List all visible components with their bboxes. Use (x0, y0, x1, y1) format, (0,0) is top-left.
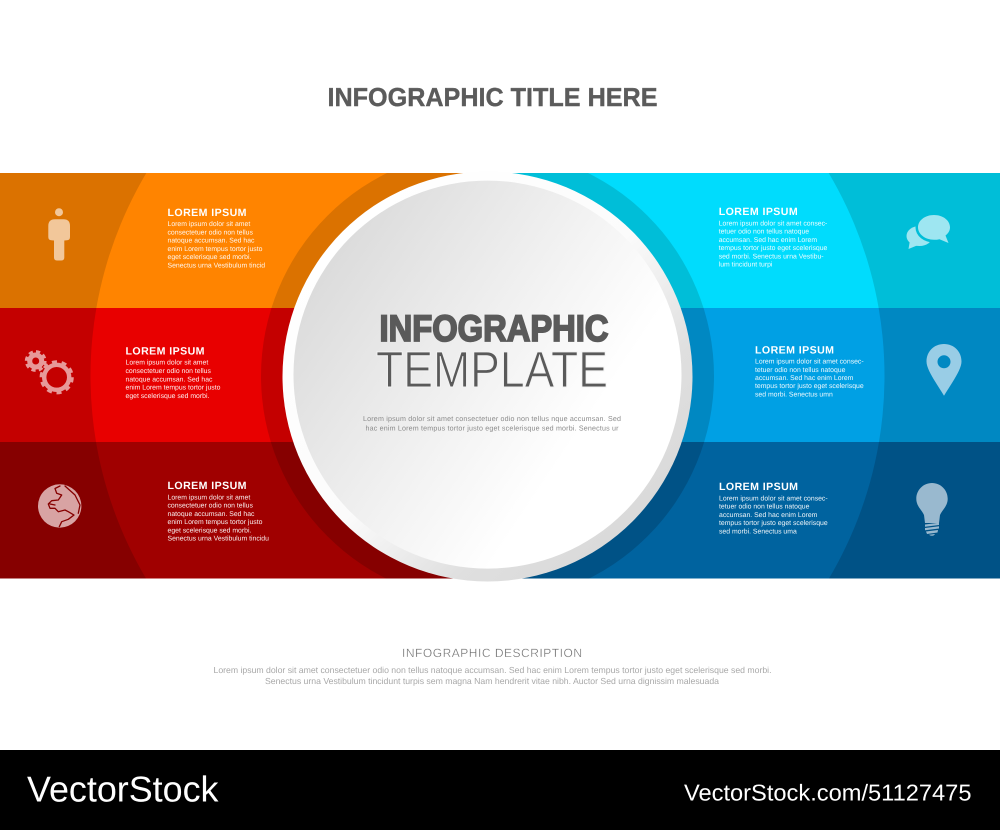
text block: cyan: Lorem ipsum dolor sit amet consec- (719, 220, 827, 227)
center text: hac enim Lorem tempus tortor justo eget scelerisque sed morbi. Senectus ur (366, 424, 619, 432)
band: navy (522, 442, 1000, 578)
text block: maroon (168, 480, 269, 543)
text block: blue: Lorem ipsum dolor sit amet consec- (755, 358, 864, 366)
text block: navy: Lorem ipsum dolor sit amet consec- (719, 495, 828, 502)
text block: orange: Lorem ipsum dolor sit amet (168, 221, 250, 228)
center heading: TEMPLATE (376, 341, 608, 398)
text block: maroon: enim Lorem tempus tortor justo (168, 519, 263, 526)
icon: globe (38, 484, 81, 528)
center text (363, 415, 621, 432)
text block: maroon: natoque accumsan. Sed hac (168, 511, 255, 518)
center text: Lorem ipsum dolor sit amet consectetuer odio non tellus nque accumsan. Sed (363, 415, 621, 423)
text block: cyan: lum tincidunt turpi (719, 262, 773, 269)
text block: red: Lorem ipsum dolor sit amet (126, 360, 208, 367)
center heading: INFOGRAPHIC (380, 308, 608, 349)
text block: navy: tetuer odio non tellus natoque (719, 504, 810, 510)
text block: maroon: consectetuer odio non tellus (168, 503, 253, 510)
center heading (376, 308, 608, 398)
text block: maroon: eget scelerisque sed morbi. (168, 527, 251, 534)
icon: person (48, 208, 70, 260)
text block: blue: LOREM IPSUM (755, 344, 834, 356)
text block: maroon: LOREM IPSUM (168, 480, 247, 492)
footer bar (0, 750, 1000, 830)
icon: map pin (926, 344, 962, 396)
text block: cyan: accumsan. Sed hac enim Lorem (719, 237, 817, 244)
text block: orange: enim Lorem tempus tortor justo (168, 246, 263, 253)
text block: cyan: tempus tortor justo eget scelerisque (719, 245, 828, 252)
text block: orange: natoque accumsan. Sed hac (168, 238, 255, 245)
text block: orange: Senectus urna Vestibulum tincid (168, 262, 265, 269)
description text (214, 665, 772, 686)
icon: light bulb (916, 483, 948, 536)
text block: maroon: Lorem ipsum dolor sit amet (168, 494, 250, 501)
text block: orange: eget scelerisque sed morbi. (168, 254, 251, 261)
icon: gears (26, 352, 72, 393)
band: red (0, 308, 294, 442)
footer bar: VectorStock (27, 768, 219, 810)
text block: red: enim Lorem tempus tortor justo (126, 385, 221, 392)
text block: cyan: LOREM IPSUM (719, 206, 798, 218)
text block: navy (719, 481, 828, 535)
text block: blue: accumsan. Sed hac enim Lorem (755, 375, 854, 382)
footer bar: VectorStock.com/51127475 (684, 780, 972, 806)
band: orange (0, 173, 463, 308)
text block: red: consectetuer odio non tellus (126, 368, 211, 375)
text block: cyan: tetuer odio non tellus natoque (719, 229, 809, 236)
text block: navy: accumsan. Sed hac enim Lorem (719, 512, 818, 519)
icon: chat bubbles (906, 212, 952, 249)
text block: maroon: Senectus urna Vestibulum tincidu (168, 536, 269, 543)
text block: red (126, 346, 221, 400)
band: cyan (512, 173, 1000, 308)
description heading: INFOGRAPHIC DESCRIPTION (402, 646, 582, 660)
description text: Lorem ipsum dolor sit amet consectetuer odio non tellus natoque accumsan. Sed hac enim Lorem tempus tortor justo eget scelerisque sed morbi. (214, 665, 772, 675)
central circle (282, 172, 692, 582)
text block: blue: tempus tortor justo eget scelerisque (755, 383, 864, 390)
band: blue (680, 308, 1000, 442)
text block: red: natoque accumsan. Sed hac (126, 376, 213, 383)
text block: orange: LOREM IPSUM (168, 207, 247, 219)
text block: orange (168, 207, 265, 269)
text block: cyan: sed morbi. Senectus urna Vestibu- (719, 253, 824, 260)
text block: navy: LOREM IPSUM (719, 481, 798, 493)
text block: blue: tetuer odio non tellus natoque (755, 367, 846, 374)
text block: navy: sed morbi. Senectus uma (719, 528, 797, 535)
text block: red: LOREM IPSUM (126, 346, 205, 358)
text block: navy: tempus tortor justo eget scelerisque (719, 520, 828, 527)
text block: cyan (719, 206, 828, 269)
text block: blue (755, 344, 864, 398)
text block: blue: sed morbi. Senectus umn (755, 391, 833, 398)
title: INFOGRAPHIC TITLE HERE (328, 82, 658, 112)
text block: orange: consectetuer odio non tellus (168, 229, 253, 236)
band: maroon (0, 442, 453, 578)
text block: red: eget scelerisque sed morbi. (126, 393, 209, 400)
description text: Senectus urna Vestibulum tincidunt turpis sem magna Nam hendrerit vitae nibh. Auctor Sed urna dignissim malesuada (265, 676, 719, 686)
